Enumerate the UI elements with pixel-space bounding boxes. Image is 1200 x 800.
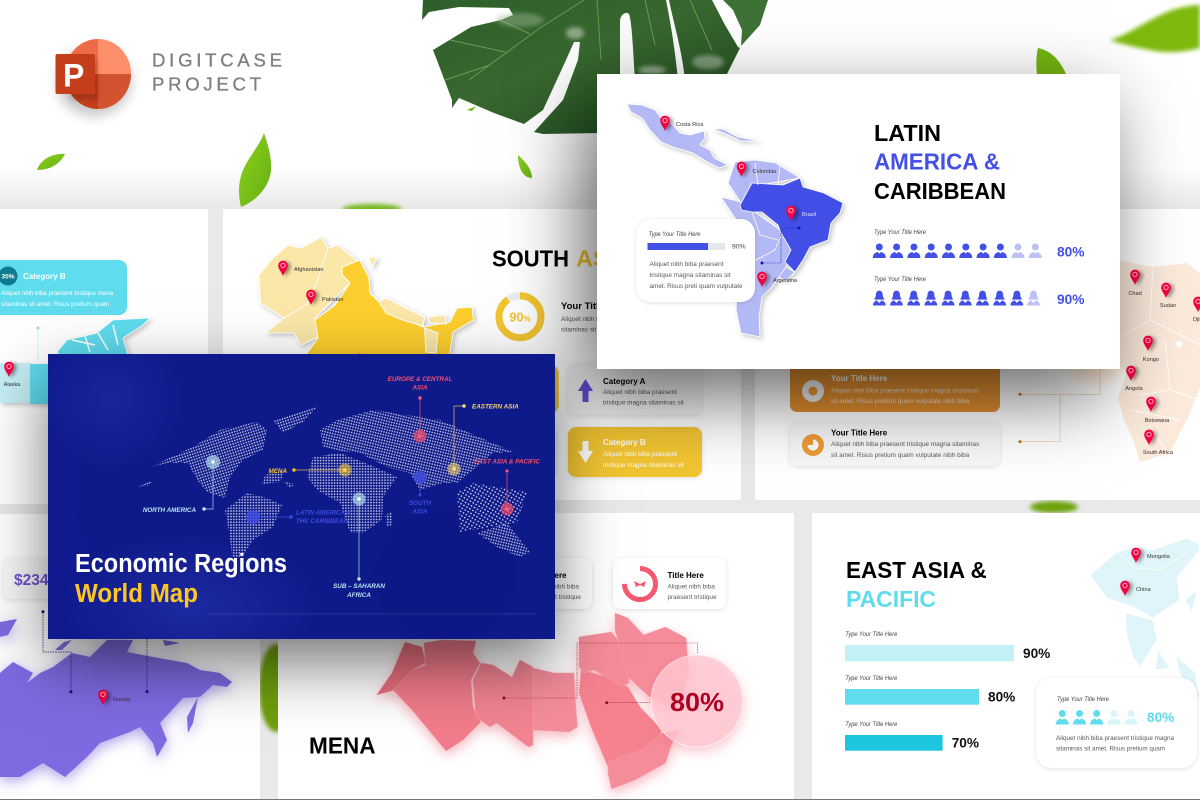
map: MENA (376, 613, 689, 789)
pin: Argentina: Argentina (773, 278, 798, 284)
map: Russia and Europe (0, 619, 232, 777)
pictogram: 90% (873, 277, 1085, 307)
card: partial title: Aliquet nibh biba (532, 584, 579, 590)
marker: South Asia: SOUTH (409, 500, 431, 507)
title: PACIFIC (846, 586, 936, 612)
text block: sitaminas sit amet (561, 326, 612, 334)
pin: Afghanistan: Afghanistan (294, 267, 324, 273)
card: Category B: Category B (603, 438, 646, 447)
pin: Colombia: Colombia (752, 169, 777, 175)
card: Category A: tristique magna sitaminas sit (603, 400, 684, 406)
callout: 80% (651, 655, 743, 747)
marker: Latin America: THE CARIBBEAN (296, 518, 349, 525)
title (75, 550, 287, 608)
marker: Eastern Asia: EASTERN ASIA (472, 404, 519, 410)
marker: North America: NORTH AMERICA (143, 507, 196, 514)
brand name (152, 50, 282, 95)
pin: Argentina (757, 272, 798, 287)
pictogram: 80%: Type Your Title Here (874, 230, 927, 236)
pictogram: 80%: 80% (1057, 244, 1085, 260)
pin: Alaska: Alaska (4, 382, 21, 388)
pin: Pakistan: Pakistan (322, 297, 343, 303)
connector lines (1020, 365, 1100, 442)
title: World Map (75, 580, 198, 608)
marker: Europe and Central Asia: ASIA (411, 384, 428, 392)
pin: Kongo (1143, 336, 1159, 363)
marker: East Asia and Pacific: EAST ASIA & PACIFIC (474, 458, 540, 466)
card: white: Your Title Here (831, 428, 888, 438)
panel: MENA slide (278, 513, 794, 799)
card: donut title: Title Here (668, 571, 704, 580)
connector lines (43, 612, 147, 692)
card: orange: sit amet. Risus pretium quam vulputate nibh biba (831, 398, 970, 405)
marker: Latin America: LATIN AMERICA & (296, 510, 351, 516)
pin: Botswana: Botswana (1145, 418, 1170, 424)
map: Africa (1100, 255, 1200, 462)
card: partial title: Title Here (530, 571, 567, 580)
card: people 80%: Aliquet nibh biba praesent tristique magna (1056, 735, 1174, 742)
pin: Sudan (1160, 283, 1176, 309)
title (846, 557, 987, 612)
pin: Brazil: Brazil (802, 212, 816, 218)
pin: Costa Rica: Costa Rica (676, 122, 704, 128)
map: South Asia (259, 237, 474, 362)
text block (561, 301, 681, 334)
title (492, 246, 632, 272)
card: orange: Your Title Here (831, 374, 888, 383)
bar chart (845, 632, 1051, 751)
marker: Latin America (246, 510, 351, 525)
card: Category A: Category A (603, 377, 646, 386)
connector lines (762, 228, 799, 263)
bar chart: Type Your Title Here (845, 676, 898, 682)
card: Category B: Category B (23, 272, 66, 281)
card: partial title: praesent tristique (532, 594, 581, 601)
marker: Sub-Saharan Africa (333, 492, 385, 599)
dotted world map (138, 407, 530, 557)
pin: Russia (98, 690, 131, 705)
marker: Europe and Central Asia (388, 376, 453, 442)
pin: Afghanistan (278, 261, 324, 276)
card: Category B: sitaminas sit amet. Risus pretium quam (1, 301, 109, 308)
pin: Brazil (786, 206, 816, 221)
card: people 80%: 80% (1147, 709, 1175, 725)
card: partial title (480, 558, 592, 609)
marker: MENA: MENA (268, 468, 287, 475)
pin: Chad (1128, 270, 1142, 297)
title: LATIN (874, 120, 941, 146)
pin: Alaska (4, 362, 21, 388)
marker: North America (143, 455, 220, 514)
map: East Asia (1090, 538, 1200, 700)
card: white (790, 421, 1000, 466)
pin: Pakistan (306, 290, 343, 305)
brand name: DIGITCASE (152, 50, 282, 71)
card: 90% progress: amet. Risus preti quam vulputate (650, 283, 743, 290)
panel: Latin America and Caribbean slide (597, 74, 1120, 369)
card: Category B: tristique magna sitaminas sit (603, 462, 684, 469)
card: 90% progress: 90% (732, 244, 746, 250)
map: Canada and Alaska (0, 318, 150, 404)
card: Category A: Aliquet nibh biba praesent (603, 389, 677, 396)
donut 90% (499, 296, 541, 338)
title: ASIA (576, 246, 632, 272)
card: orange: Aliquet nibh biba praesent tristique magna sitaminas (831, 388, 979, 394)
card: Category B: Aliquet nibh biba praesent (603, 451, 677, 458)
donut 90%: 90% (509, 310, 531, 325)
pin: South Africa (1143, 430, 1174, 456)
card: donut title: praesent tristique (668, 594, 717, 601)
card: white: sit amet. Risus pretium quam vulputate nibh biba (831, 452, 970, 459)
bar chart: 80% (988, 689, 1016, 705)
pin: Mongolia: Mongolia (1147, 554, 1171, 560)
card: value (3, 558, 93, 599)
marker: Sub-Saharan Africa: AFRICA (346, 592, 371, 599)
pin: Russia: Russia (113, 697, 131, 703)
brand name: PROJECT (152, 74, 261, 95)
pictogram: 80% (873, 230, 1085, 260)
callout: 80%: 80% (670, 687, 724, 717)
card: 90% progress: tristique magna sitaminas sit (650, 272, 731, 279)
pin: Kongo: Kongo (1143, 357, 1159, 363)
bar chart: Type Your Title Here (845, 722, 898, 728)
pin: Sudan: Sudan (1160, 303, 1176, 309)
card: value: $234 (14, 572, 49, 589)
marker: MENA (268, 464, 352, 476)
pin: Angola: Angola (1125, 386, 1144, 392)
card: Category B: 35% (1, 274, 15, 280)
title: MENA (309, 732, 376, 758)
panel: South Asia slide (223, 209, 741, 500)
pictogram: 90%: 90% (1057, 291, 1085, 307)
panel: Economic Regions world map slide (48, 354, 555, 639)
bar chart: Type Your Title Here (845, 632, 898, 638)
marker: East Asia and Pacific (474, 458, 540, 516)
pin: India (354, 354, 364, 369)
pin: Angola (1125, 366, 1144, 392)
card: people 80%: Type Your Title Here (1057, 697, 1110, 703)
pin: Djibouti (1193, 297, 1200, 323)
connector lines (504, 643, 698, 703)
pin: Mongolia (1131, 548, 1171, 563)
title: Economic Regions (75, 550, 287, 578)
card: Category B (568, 427, 702, 477)
panel: Africa slide (755, 209, 1200, 500)
pin: China: China (1136, 587, 1152, 593)
title: AMERICA & (874, 149, 1000, 175)
card: 90% progress: Aliquet nibh biba praesent (650, 261, 724, 268)
title (874, 120, 1006, 204)
marker: Eastern Asia (448, 404, 519, 476)
title: SOUTH (492, 246, 569, 272)
panel: North America slide (partial) (0, 209, 208, 504)
title: CARIBBEAN (874, 178, 1006, 204)
map: Latin America (627, 104, 843, 337)
text block: Aliquet nibh biba praesent tristique magna (561, 316, 681, 323)
card: 90% progress: Type Your Title Here (648, 232, 701, 238)
monstera leaf (422, 0, 768, 134)
cards behind world slide (400, 365, 559, 477)
pin: China (1120, 581, 1152, 596)
bar chart: 90% (1023, 645, 1051, 661)
bar chart: 70% (952, 735, 980, 751)
card: 90% progress (636, 219, 755, 302)
card: Category B: Aliquet nibh biba praesent tristique mana (1, 290, 114, 297)
logo: PowerPoint icon: P (63, 58, 84, 94)
title: EAST ASIA & (846, 557, 987, 583)
pictogram: 90%: Type Your Title Here (874, 277, 927, 283)
card: donut title: Aliquet nibh biba (668, 584, 715, 590)
pin: Botswana (1145, 397, 1170, 424)
card: Category A (568, 363, 702, 415)
card: Category B (0, 260, 127, 315)
pin: Costa Rica (660, 116, 704, 131)
card: orange (790, 360, 1000, 412)
pin: Colombia (737, 162, 777, 177)
card: donut title (613, 558, 726, 609)
marker: Europe and Central Asia: EUROPE & CENTRAL (388, 376, 453, 383)
panel: East Asia and Pacific slide (812, 513, 1200, 799)
card: white: Aliquet nibh biba praesent tristique magna sitaminas (831, 441, 979, 448)
pin: South Africa: South Africa (1143, 450, 1174, 456)
marker: South Asia (409, 470, 431, 516)
card: people 80%: sitaminas sit amet. Risus pretium quam (1056, 746, 1165, 752)
panel: Europe and Central Asia slide (0, 514, 260, 799)
marker: South Asia: ASIA (411, 508, 428, 516)
marker: Sub-Saharan Africa: SUB – SAHARAN (333, 583, 385, 590)
card: people 80% (1036, 678, 1197, 768)
text block: Your Title Here (561, 301, 628, 312)
pin: Chad: Chad (1128, 291, 1142, 297)
logo: PowerPoint icon (56, 39, 131, 116)
